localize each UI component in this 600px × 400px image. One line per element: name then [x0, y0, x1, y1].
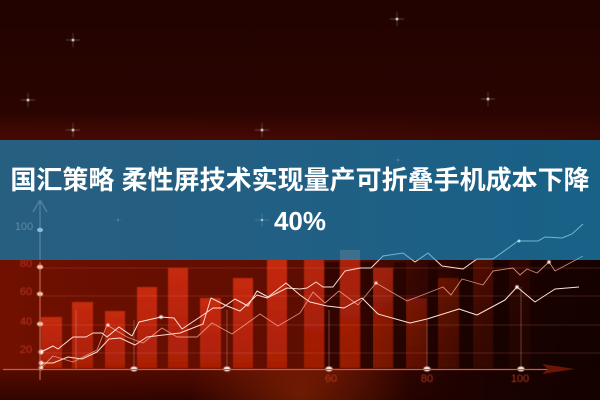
axis labels: 40: [20, 316, 32, 328]
axis labels: 20: [20, 344, 32, 356]
title: 国汇策略 柔性屏技术实现量产可折叠手机成本下降: [10, 165, 590, 195]
blue-tinted chart elements in band: [15, 156, 583, 269]
vertical stems: [76, 287, 521, 369]
axis labels: [20, 258, 529, 385]
stars on dark sky: [21, 12, 495, 137]
blue-tinted chart elements in band: 100: [15, 221, 33, 233]
axis labels: 80: [20, 258, 32, 270]
axis labels: 60: [20, 286, 32, 298]
dark gaps between bars on the right: [325, 262, 509, 368]
axis labels: 100: [511, 373, 529, 385]
title: 40%: [274, 206, 326, 236]
axes: [3, 262, 575, 380]
title: [10, 165, 590, 236]
title band: [0, 140, 600, 260]
axis labels: 60: [325, 373, 337, 385]
axis labels: 80: [421, 373, 433, 385]
grid lines: [40, 268, 600, 353]
bar chart columns: [41, 250, 530, 368]
line series: [42, 260, 579, 368]
data point dots: [37, 260, 551, 371]
lower dark strip and right vignette: [0, 260, 600, 400]
